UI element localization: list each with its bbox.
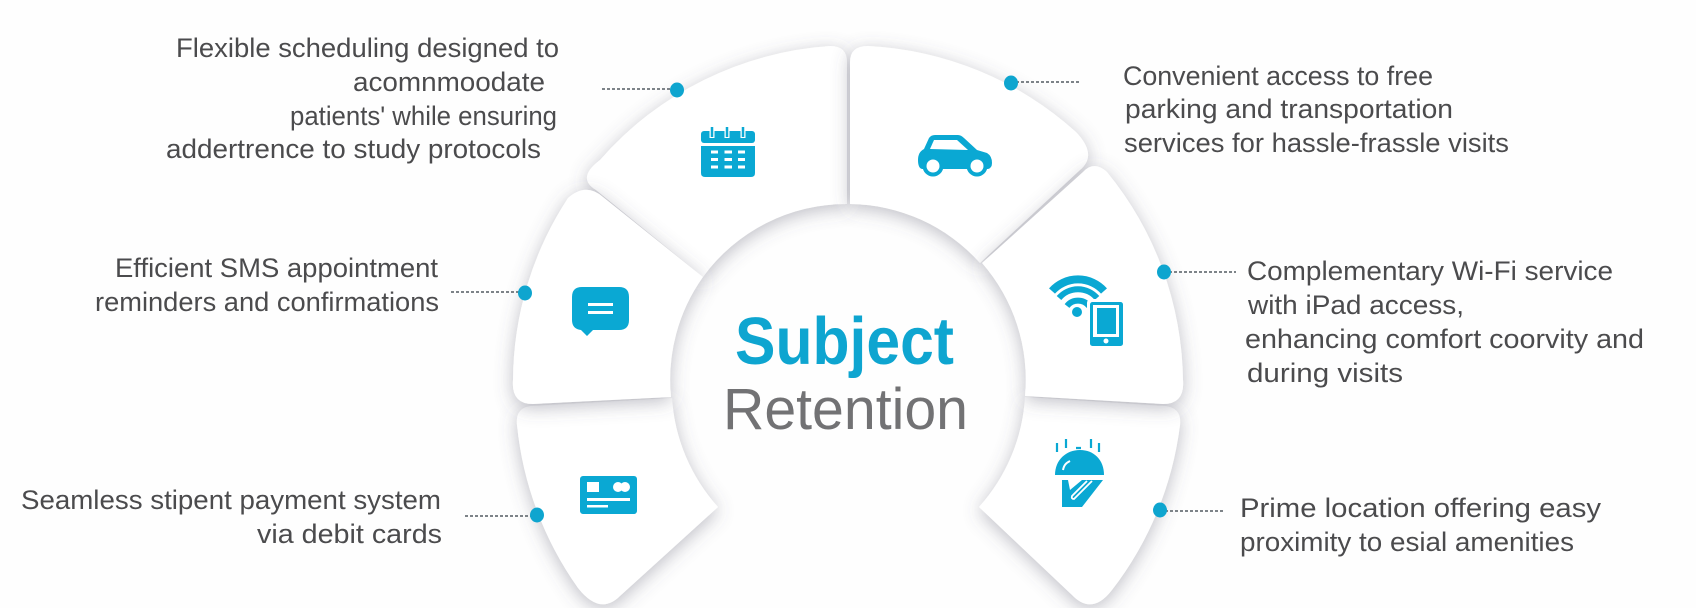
panel: stipend payment [21,398,718,604]
panel: parking and transportation [850,46,1509,263]
text: stipend payment: Seamless stipent payment system [21,485,441,515]
text: prime location [1240,493,1602,557]
center title: subject retention [723,304,968,442]
text: parking and transportation: Convenient access to free [1123,61,1433,91]
text: flexible scheduling [166,33,559,164]
text: Wi-Fi and iPad: Complementary Wi-Fi service [1247,256,1613,286]
icon: calendar [701,127,755,177]
leader: parking and transportation [1004,76,1081,90]
leader: Wi-Fi and iPad [1157,264,1236,280]
text: flexible scheduling: patients' while ensuring [290,101,557,131]
leader: flexible scheduling [602,82,684,98]
heading: Retention: Retention [723,377,968,442]
text: SMS reminders: reminders and confirmations [95,287,439,317]
text: Wi-Fi and iPad: enhancing comfort coorvity and [1245,324,1644,354]
leader: stipend payment [465,508,544,522]
text: parking and transportation [1123,61,1509,158]
text: Wi-Fi and iPad: with iPad access, [1247,290,1464,320]
icon: Wi-Fi and tablet [1052,279,1126,349]
icon: chat bubble [572,287,629,336]
panel: prime location [979,397,1602,604]
text: prime location: Prime location offering easy [1240,493,1602,523]
text: stipend payment: via debit cards [257,519,442,549]
text: flexible scheduling: acomnmoodate [353,67,545,97]
text: stipend payment [21,485,442,549]
heading: Subject: Subject [735,304,954,379]
text: SMS reminders [95,253,439,317]
panel: SMS reminders [95,190,703,404]
text: flexible scheduling: addertrence to study protocols [166,134,541,164]
leader: SMS reminders [451,286,532,300]
text: SMS reminders: Efficient SMS appointment [115,253,439,283]
leader: prime location [1153,502,1225,518]
panel: flexible scheduling [166,33,847,277]
text: Wi-Fi and iPad [1245,256,1644,388]
text: parking and transportation: services for hassle-frassle visits [1124,128,1509,158]
panel: Wi-Fi and iPad [982,166,1644,404]
icon: cloche and hand [1055,439,1104,507]
icon: car [918,135,992,176]
text: flexible scheduling: Flexible scheduling designed to [176,33,559,63]
text: Wi-Fi and iPad: during visits [1247,358,1403,388]
text: prime location: proximity to esial amenities [1240,527,1574,557]
icon: debit card [580,476,637,514]
text: parking and transportation: parking and transportation [1125,94,1453,124]
